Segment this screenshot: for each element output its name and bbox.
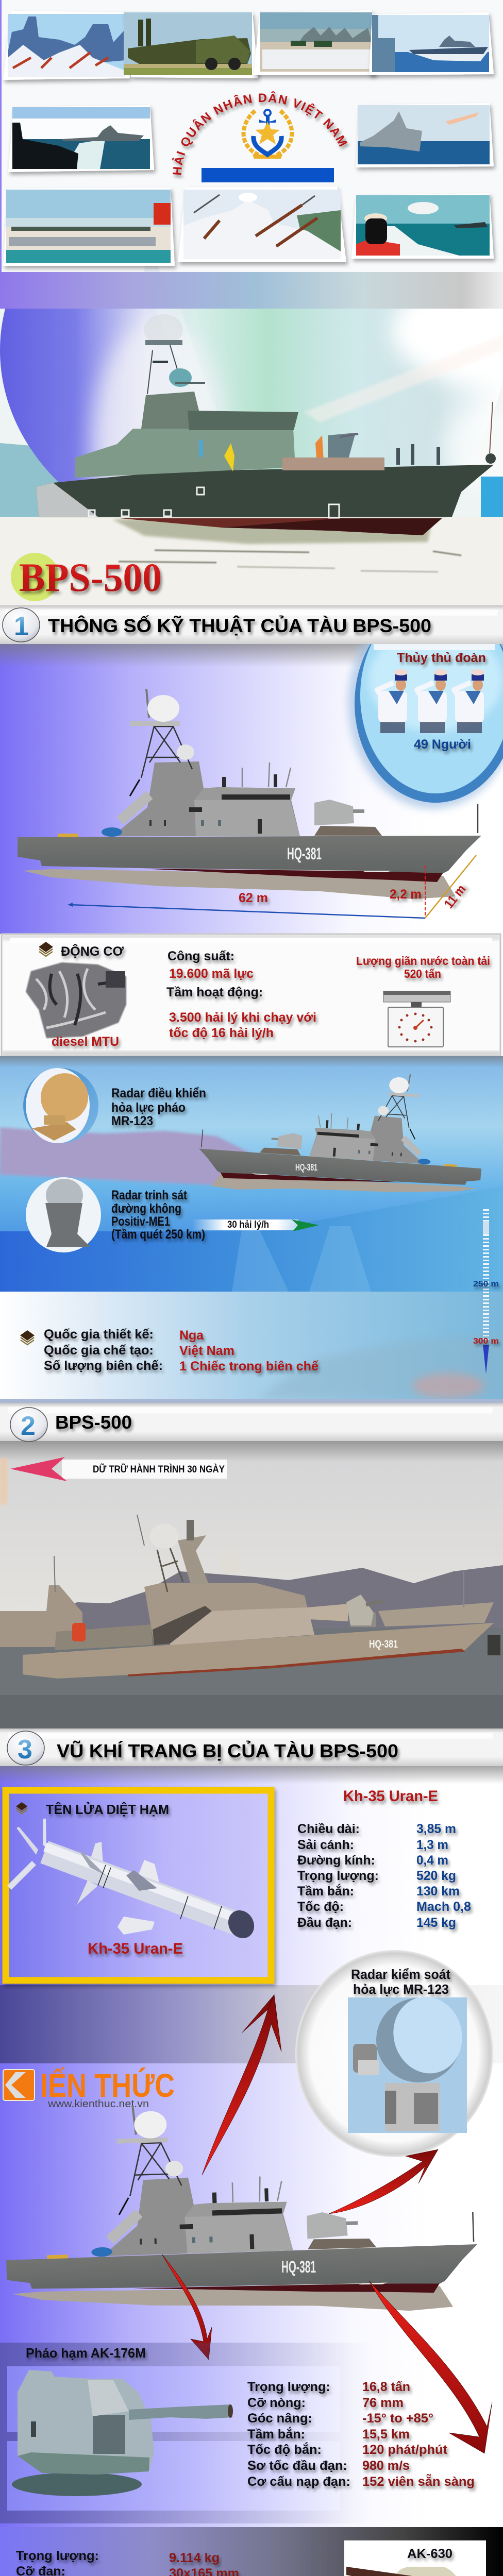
engine label: diesel MTU <box>52 1035 119 1049</box>
AK-630 spec labels <box>16 2549 115 2576</box>
gun spec labels: Cỡ nòng: <box>247 2396 306 2410</box>
missile name: Kh-35 Uran-E <box>88 1940 183 1957</box>
heading: BPS-500: BPS-500 <box>19 555 162 600</box>
heading: curved navy title: HẢI QUÂN NHÂN DÂN VIỆT NAM <box>172 91 350 179</box>
spec values: Mach 0,8 <box>416 1900 471 1914</box>
depth scale: 250 m <box>473 1280 499 1289</box>
gun spec labels: Tốc độ bắn: <box>247 2442 322 2457</box>
AK-630 photo box <box>344 2540 486 2576</box>
panel: radar and sea scene <box>0 1056 503 1344</box>
specs title: Kh-35 Uran-E <box>343 1788 438 1805</box>
radar Positiv-ME1 label <box>111 1188 205 1242</box>
icon: engine block <box>26 962 126 1038</box>
spec labels <box>297 1822 379 1930</box>
gun spec labels: Tầm bắn: <box>247 2426 305 2442</box>
crew count: 49 Người <box>414 737 471 752</box>
AK-630 spec values <box>169 2551 262 2576</box>
power and range text: Tầm hoạt động: <box>166 985 263 999</box>
spec values: 3,85 m <box>416 1822 456 1836</box>
spec labels: Trọng lượng: <box>297 1869 379 1883</box>
depth marker 300 m: 300 m <box>473 1337 499 1346</box>
photo: ship bow view <box>8 105 154 172</box>
arrow: to AK-630 gun <box>369 2281 492 2453</box>
beam line 11 m <box>425 855 476 918</box>
badge 1 <box>3 608 40 642</box>
photo: missile launch from frigate <box>356 103 494 167</box>
radar Positiv-ME1 label: (Tầm quét 250 km) <box>111 1227 205 1242</box>
section 3 heading bar <box>0 1728 503 1766</box>
panel: Kh-35 specs <box>297 1788 471 1930</box>
panel: section 1 background <box>0 644 503 934</box>
spec values: 520 kg <box>416 1869 456 1883</box>
gun spec values: 120 phát/phút <box>362 2443 448 2457</box>
section 2 heading bar <box>0 1403 503 1442</box>
AK-630 spec labels: Trọng lượng: <box>16 2549 99 2563</box>
spec values: 0,4 m <box>416 1853 448 1868</box>
emblem: Vietnam People's Navy anchor <box>244 110 292 159</box>
length arrow 62 m: 62 m <box>239 891 268 905</box>
power and range text: 3.500 hải lý khi chạy với <box>169 1010 316 1025</box>
section 3 title: VŨ KHÍ TRANG BỊ CỦA TÀU BPS-500 <box>57 1740 398 1761</box>
spec values: 145 kg <box>416 1916 456 1930</box>
callout: 30 days endurance: DỮ TRỮ HÀNH TRÌNH 30 NGÀY <box>93 1464 225 1475</box>
spec labels: Chiều dài: <box>297 1822 360 1836</box>
weapons ship <box>2 2095 479 2323</box>
panel: radar MR-123 bubble <box>295 1950 493 2157</box>
arrow: to radar bubble <box>329 2149 438 2214</box>
photo ship: HQ-381 <box>369 1638 398 1650</box>
radar Positiv-ME1 label: Radar trinh sát <box>111 1188 188 1202</box>
panel: AK-176M gun <box>0 2343 475 2523</box>
photo ship <box>23 1515 500 1679</box>
panel: Kh-35 missile frame <box>6 1790 271 1980</box>
design and build list: Nga <box>179 1328 204 1343</box>
decorative blue bar <box>202 168 334 182</box>
spec labels: Đầu đạn: <box>297 1916 352 1930</box>
photo: marching sailors with rifles <box>178 187 346 262</box>
panel: hero ship photo <box>0 144 503 605</box>
section 2 title: BPS-500 <box>55 1412 132 1433</box>
power and range text: Công suất: <box>167 949 234 963</box>
icon: diamond bullet <box>20 1330 35 1345</box>
weapons ship: HQ-381 <box>281 2258 316 2276</box>
beam line 11 m: 11 m <box>442 882 469 911</box>
gun spec values: 16,8 tấn <box>362 2380 410 2394</box>
missile heading: TÊN LỬA DIỆT HẠM <box>46 1801 169 1817</box>
speed arrow: 30 hải lý/h <box>227 1219 269 1230</box>
design and build list: Việt Nam <box>179 1344 234 1358</box>
panel: harbour photo <box>0 1441 503 1728</box>
AK-630 photo box: AK-630 <box>407 2547 452 2561</box>
photo: coastal missile truck <box>124 12 258 78</box>
gun illustration <box>12 2370 233 2496</box>
panel: crew oval <box>348 598 503 809</box>
draft line 2,2 m: 2,2 m <box>390 887 422 902</box>
bubble label <box>351 1967 450 1997</box>
arrow: to missile panel <box>202 1995 281 2175</box>
spec values <box>416 1822 471 1930</box>
ship side view with dimensions <box>18 689 481 918</box>
spec labels: Tầm bắn: <box>297 1883 354 1899</box>
badge 2: 2 <box>21 1411 36 1441</box>
photo: sailors and warship <box>3 11 130 80</box>
gun spec labels: Góc nâng: <box>247 2411 312 2426</box>
gun spec labels: Cơ cấu nạp đạn: <box>247 2475 350 2489</box>
radar MR-123 label: hỏa lực pháo <box>111 1100 186 1115</box>
power and range text <box>166 949 316 1040</box>
bubble label: Radar kiểm soát <box>351 1967 450 1982</box>
logo: Kien Thuc: IẾN THỨC <box>40 2067 175 2104</box>
photo: parade ground with ships <box>254 10 375 75</box>
hull number: HQ-381 <box>295 1162 317 1173</box>
photo: naval parade on the coast <box>3 188 175 266</box>
bubble label: hỏa lực MR-123 <box>353 1981 449 1997</box>
radar Positiv-ME1 label: đường không <box>111 1201 181 1216</box>
badge 2 <box>10 1408 47 1442</box>
gun spec values: 76 mm <box>362 2396 404 2410</box>
gun spec values: -15° to +85° <box>362 2411 433 2426</box>
radar MR-123 label: MR-123 <box>111 1114 153 1128</box>
icon: diamond bullet <box>39 942 53 956</box>
badge 3: 3 <box>18 1735 32 1765</box>
gun spec values: 152 viên sẵn sàng <box>362 2473 475 2489</box>
displacement text <box>356 954 490 980</box>
gun spec values: 980 m/s <box>362 2459 410 2473</box>
radar MR-123 label <box>111 1086 206 1128</box>
panel: engine and range <box>2 934 500 1056</box>
ship cruising <box>196 1060 489 1206</box>
logo: Kien Thuc: www.kienthuc.net.vn <box>47 2098 149 2110</box>
AK-630 spec values: 9.114 kg <box>169 2551 220 2565</box>
design and build list: Quốc gia thiết kế: <box>44 1327 154 1342</box>
panel: origin data <box>0 1292 503 1403</box>
panel: weapons background <box>0 1766 503 2527</box>
design and build list <box>44 1327 318 1374</box>
hero ship <box>36 314 496 544</box>
gun spec labels <box>247 2380 350 2489</box>
arrow: to AK-176M gun <box>162 2254 212 2360</box>
spec labels: Tốc độ: <box>297 1900 344 1914</box>
gun spec values <box>362 2380 475 2489</box>
icon: diamond bullet <box>16 1802 27 1814</box>
logo: Kien Thuc <box>3 2067 175 2110</box>
radar MR-123 label: Radar điều khiển <box>111 1086 206 1100</box>
draft line 2,2 m <box>390 866 425 918</box>
callout: 30 days endurance <box>10 1457 227 1481</box>
gun spec values: 15,5 km <box>362 2427 410 2442</box>
spec labels: Đường kính: <box>297 1853 375 1868</box>
section 1 title: THÔNG SỐ KỸ THUẬT CỦA TÀU BPS-500 <box>48 615 431 636</box>
length arrow 62 m <box>68 891 425 918</box>
photo: corvette at sea <box>369 12 494 75</box>
panel: AK-630 gun <box>0 2527 503 2576</box>
spec values: 1,3 m <box>416 1838 448 1852</box>
hull number: HQ-381 <box>287 844 322 863</box>
speed arrow <box>192 1219 319 1231</box>
radar Positiv-ME1 oval <box>26 1177 101 1252</box>
radar MR-123 oval <box>23 1068 98 1143</box>
badge 3 <box>7 1731 44 1765</box>
radar illustration <box>348 1989 471 2133</box>
icon: three saluting sailors <box>377 669 484 733</box>
panel: photo collage header <box>0 0 499 272</box>
design and build list: Quốc gia chế tạo: <box>44 1343 154 1358</box>
icon: weighing scale <box>383 991 450 1047</box>
missile illustration <box>7 1819 259 1943</box>
section 1 heading bar <box>0 605 503 644</box>
radar Positiv-ME1 label: Positiv-ME1 <box>111 1214 170 1229</box>
displacement text: Lượng giãn nước toàn tải <box>356 954 490 968</box>
spec values: 130 km <box>416 1884 460 1899</box>
power and range text: tốc độ 16 hải lý/h <box>169 1026 274 1040</box>
power and range text: 19.600 mã lực <box>169 967 254 981</box>
crew label: Thủy thủ đoàn <box>397 651 486 665</box>
design and build list: Số lượng biên chế: <box>44 1359 163 1373</box>
depth scale <box>473 1209 499 1344</box>
gun spec labels: Sơ tốc đầu đạn: <box>247 2459 347 2473</box>
spec labels: Sải cánh: <box>297 1838 354 1852</box>
gun spec labels: Trọng lượng: <box>247 2380 330 2394</box>
photo: boats at sea with sailor <box>351 193 494 259</box>
engine heading: ĐỘNG CƠ <box>61 943 124 959</box>
depth marker 300 m <box>473 1337 499 1374</box>
badge 1: 1 <box>14 612 29 641</box>
gun title: Pháo hạm AK-176M <box>26 2345 146 2361</box>
design and build list: 1 Chiếc trong biên chế <box>179 1359 318 1374</box>
displacement text: 520 tấn <box>404 967 441 980</box>
